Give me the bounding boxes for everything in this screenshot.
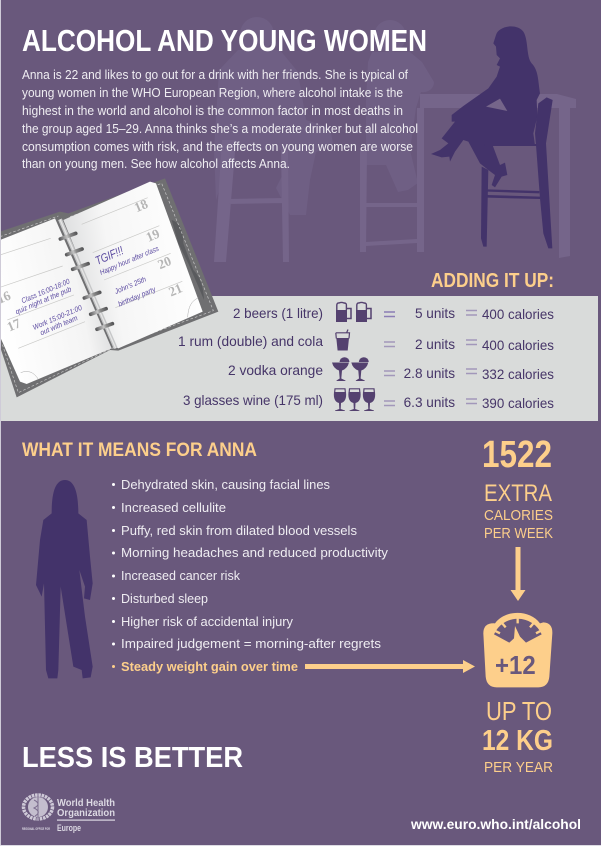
- units column: 2 units: [415, 337, 455, 352]
- handwritten diary notes: birthday party: [117, 284, 158, 309]
- weight gain stat: PER YEAR: [484, 759, 553, 776]
- grey drinks panel: [0, 296, 598, 421]
- calories column: 390 calories: [482, 396, 554, 411]
- effects list: Puffy, red skin from dilated blood vessels: [121, 523, 357, 538]
- equals signs: [384, 310, 477, 406]
- date numbers: 20: [155, 253, 174, 272]
- left page: [0, 218, 112, 384]
- handwritten diary notes: Work 15:00-21:00: [31, 303, 84, 332]
- extra calories stat: [482, 434, 553, 542]
- website URL: www.euro.who.int/alcohol: [410, 816, 581, 832]
- effects list: Higher risk of accidental injury: [121, 614, 293, 629]
- slogan: LESS IS BETTER: [22, 742, 243, 774]
- WHO logo: Organization: [57, 807, 115, 819]
- weight gain stat: UP TO: [486, 696, 552, 726]
- arrow to scale: [305, 660, 475, 673]
- effects list: Steady weight gain over time: [121, 659, 298, 674]
- calories column: 400 calories: [482, 338, 554, 353]
- WHO logo: World Health: [57, 797, 115, 809]
- WHO logo: Europe: [57, 823, 81, 833]
- effects list: Increased cancer risk: [121, 568, 240, 583]
- intro text: the group aged 15–29. Anna thinks she’s a moderate drinker but all alcohol: [22, 122, 418, 136]
- handwritten diary notes: out with team: [39, 313, 79, 337]
- intro text: young women in the WHO European Region, where alcohol intake is the: [22, 86, 403, 100]
- title: ALCOHOL AND YOUNG WOMEN: [22, 23, 427, 58]
- right page: [63, 182, 203, 348]
- handwritten diary notes: [14, 243, 160, 337]
- page corners: [21, 298, 198, 379]
- units column: 5 units: [415, 306, 455, 321]
- heading: adding it up: ADDING IT UP:: [431, 270, 554, 292]
- icon: rum and cola glass: [336, 330, 350, 350]
- cover: [0, 178, 218, 397]
- date numbers: 17: [5, 315, 23, 334]
- extra calories stat: PER WEEK: [484, 525, 553, 542]
- calories column: 332 calories: [482, 367, 554, 382]
- effects list: Impaired judgement = morning-after regrets: [121, 636, 382, 651]
- units column: 6.3 units: [404, 395, 455, 410]
- ruled lines: [0, 198, 182, 348]
- icon: beer mugs: [336, 302, 371, 322]
- background silhouettes: two seated figures, stools and bar table: [214, 17, 576, 262]
- handwritten diary notes: John’s 25th: [112, 275, 147, 296]
- handwritten diary notes: Happy hour after class: [98, 244, 160, 277]
- spine: [60, 219, 116, 348]
- effects list: Disturbed sleep: [121, 591, 208, 606]
- date numbers: 19: [144, 226, 162, 245]
- intro text: Anna is 22 and likes to go out for a drink with her friends. She is typical of: [22, 68, 408, 82]
- heading: what it means for Anna: WHAT IT MEANS FOR ANNA: [22, 439, 257, 461]
- tabs: [172, 220, 204, 300]
- effects list: Increased cellulite: [121, 500, 226, 515]
- icon: vodka orange glasses: [332, 357, 369, 381]
- intro text: [22, 68, 418, 171]
- intro text: highest in the world and alcohol is the common factor in most deaths in: [22, 104, 403, 118]
- drink row labels: 1 rum (double) and cola: [178, 334, 323, 349]
- extra calories stat: EXTRA: [484, 480, 552, 507]
- icon: bathroom scale: [483, 613, 552, 687]
- icon: bathroom scale: +12: [495, 650, 536, 680]
- effects list: Dehydrated skin, causing facial lines: [121, 477, 330, 492]
- intro text: than on young men. See how alcohol affects Anna.: [22, 157, 290, 171]
- date numbers: 18: [132, 196, 150, 215]
- calories column: [482, 307, 554, 411]
- weight gain stat: [482, 696, 553, 776]
- spine highlight: [60, 219, 116, 348]
- extra calories stat: 1522: [482, 434, 552, 476]
- date numbers: 21: [166, 280, 184, 299]
- stitching: [0, 183, 213, 393]
- diary notebook: [0, 178, 218, 397]
- handwritten diary notes: quiz night at the pub: [14, 284, 73, 316]
- extra calories stat: CALORIES: [484, 507, 553, 524]
- drink row labels: [178, 306, 323, 408]
- calories column: 400 calories: [482, 307, 554, 322]
- drink row labels: 3 glasses wine (175 ml): [183, 393, 323, 408]
- date numbers: [0, 196, 184, 334]
- WHO logo: [22, 794, 115, 833]
- units column: 2.8 units: [404, 366, 455, 381]
- WHO logo: REGIONAL OFFICE FOR: [22, 827, 50, 831]
- handwritten diary notes: Class 16:00-18:00: [20, 276, 72, 305]
- icon: wine glasses: [334, 389, 375, 411]
- standing woman silhouette: [36, 480, 93, 678]
- weight gain stat: 12 KG: [482, 725, 553, 757]
- seated woman silhouette on bar stool: [431, 26, 553, 248]
- drink row labels: 2 beers (1 litre): [233, 306, 323, 321]
- units column: [404, 306, 455, 410]
- intro text: consumption comes with risk, and the effects on young women are worse: [22, 140, 413, 154]
- effects list: [112, 477, 389, 674]
- drink row labels: 2 vodka orange: [228, 363, 323, 378]
- effects list: Morning headaches and reduced productivity: [121, 545, 389, 560]
- handwritten diary notes: TGIF!!!: [93, 243, 126, 268]
- arrow down: [510, 547, 526, 601]
- rings: [58, 231, 115, 332]
